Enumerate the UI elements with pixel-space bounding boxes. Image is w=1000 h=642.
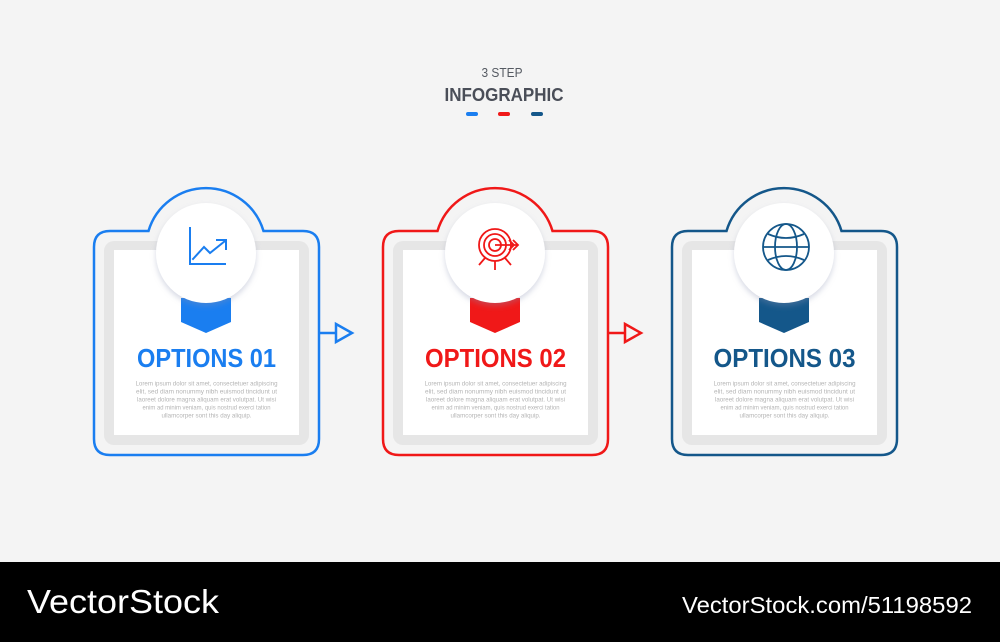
- icon: target: [479, 229, 518, 270]
- panel: options 01: [94, 188, 352, 455]
- header: 3 STEP: [482, 65, 522, 80]
- header: INFOGRAPHIC: [444, 85, 564, 105]
- footer bar: VectorStock: [27, 583, 220, 620]
- footer bar: VectorStock.com/51198592: [682, 592, 972, 618]
- panel: options 03: OPTIONS 03: [714, 343, 856, 373]
- panel: options 02: OPTIONS 02: [425, 343, 566, 373]
- panel: options 01: OPTIONS 01: [137, 343, 276, 373]
- arrow: [608, 324, 641, 342]
- icon: globe: [763, 224, 809, 270]
- panel: options 02: [383, 188, 641, 455]
- arrow: [319, 324, 352, 342]
- panel: options 03: [672, 188, 897, 455]
- footer bar: [0, 562, 1000, 642]
- header: [444, 65, 564, 116]
- icon: chart: [190, 228, 226, 264]
